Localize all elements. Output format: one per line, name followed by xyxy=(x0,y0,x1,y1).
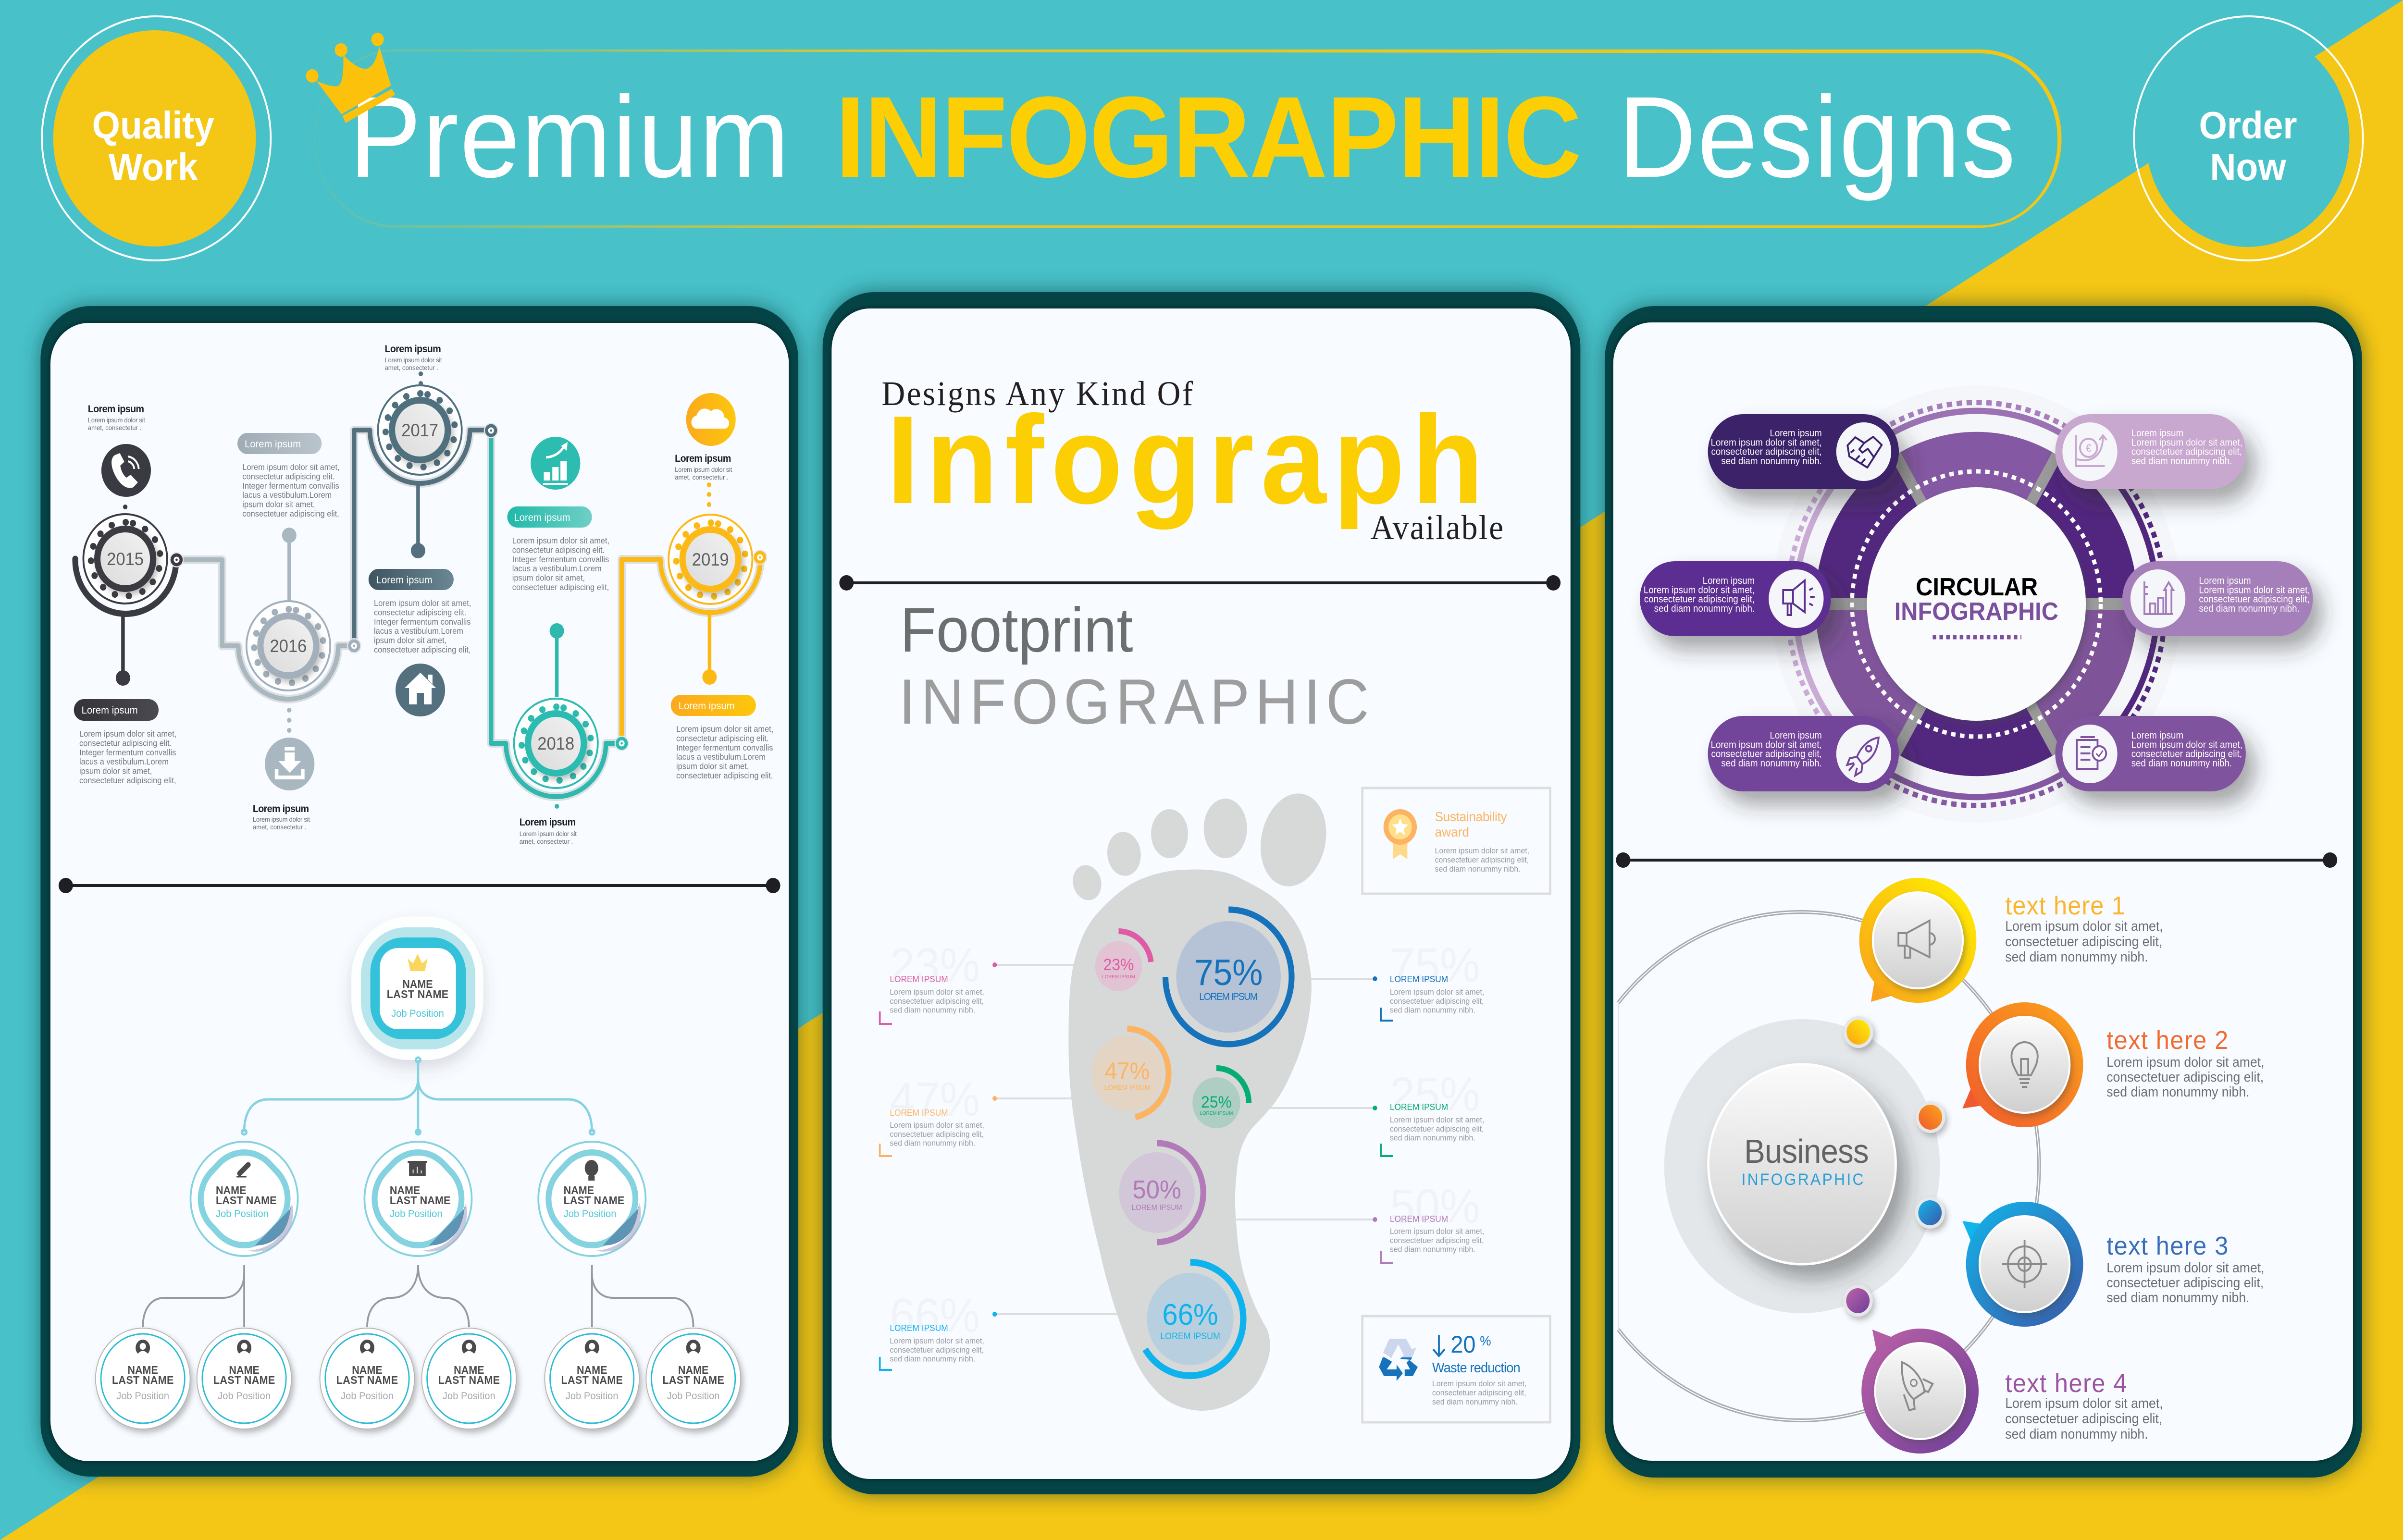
pill: finance growth xyxy=(2055,414,2246,489)
paragraph 2019: Integer fermentum convallis xyxy=(676,743,773,752)
callout 23 percent xyxy=(880,938,997,1024)
pill: megaphone: Lorem ipsum dolor sit amet, xyxy=(1644,585,1755,595)
org chart top node: NAME xyxy=(402,978,433,990)
pill 2019: Lorem ipsum xyxy=(679,700,735,712)
callout 75 percent: sed diam nonummy nibh. xyxy=(1390,1006,1475,1015)
waste reduction box: sed diam nonummy nibh. xyxy=(1432,1398,1518,1406)
icon: growth chart xyxy=(531,437,580,490)
org node left xyxy=(182,1132,307,1266)
pill: rocket: Lorem ipsum xyxy=(1770,730,1822,741)
gauge 50 percent: LOREM IPSUM xyxy=(1132,1204,1182,1212)
lorem 2016 caption: Lorem ipsum dolor sit xyxy=(253,816,310,823)
paragraph 2017: Lorem ipsum dolor sit amet, xyxy=(374,599,471,608)
icon: download xyxy=(265,738,314,790)
paragraph 2015: Lorem ipsum dolor sit amet, xyxy=(79,729,176,739)
org connectors level one xyxy=(242,1058,594,1134)
paragraph 2017: Integer fermentum convallis xyxy=(374,617,471,627)
step 3 text: Lorem ipsum dolor sit amet, xyxy=(2106,1260,2265,1275)
pill: finance growth: sed diam nonummy nibh. xyxy=(2131,456,2232,467)
paragraph 2018: consectetur adipiscing elit. xyxy=(512,545,605,555)
callout 25 percent: consectetuer adipiscing elit, xyxy=(1390,1124,1484,1133)
pill 2019 xyxy=(671,695,756,716)
order now badge: Now xyxy=(2210,146,2286,189)
pill: finance growth: Lorem ipsum dolor sit amet, xyxy=(2131,437,2242,448)
pill: document check: Lorem ipsum xyxy=(2131,730,2183,741)
pill 2017 xyxy=(369,569,454,590)
staff node 1: Job Position xyxy=(116,1390,169,1402)
gauge 50 percent: 50% xyxy=(1133,1176,1181,1204)
staff node 3: Job Position xyxy=(341,1390,394,1402)
paragraph 2017: lacus a vestibulum.Lorem xyxy=(374,627,463,636)
pill 2015 xyxy=(74,699,159,721)
callout 75 percent: Lorem ipsum dolor sit amet, xyxy=(1390,988,1484,997)
callout 25 percent: sed diam nonummy nibh. xyxy=(1390,1133,1475,1143)
staff node 4 xyxy=(421,1328,516,1429)
org chart top node: Job Position xyxy=(391,1008,444,1019)
lorem 2017 top caption: amet, consectetur . xyxy=(385,364,438,371)
gauge 66 percent xyxy=(1145,1262,1243,1376)
staff node 2: LAST NAME xyxy=(213,1374,275,1386)
org connectors level two xyxy=(143,1265,694,1327)
sustainability award box: Sustainability xyxy=(1435,809,1507,824)
step 3 text: sed diam nonummy nibh. xyxy=(2106,1290,2250,1305)
org node right: Job Position xyxy=(564,1208,616,1220)
quality work badge: Quality xyxy=(92,104,214,147)
org chart top node xyxy=(351,917,483,1060)
org node centre: NAME xyxy=(390,1184,420,1196)
org node left: LAST NAME xyxy=(216,1194,277,1207)
step 1 text: Lorem ipsum dolor sit amet, xyxy=(2005,918,2163,934)
waste reduction box: 20 xyxy=(1450,1331,1475,1358)
quality work badge xyxy=(42,16,271,260)
paragraph 2016: consectetur adipiscing elit. xyxy=(242,472,335,481)
pill: partnership xyxy=(1708,414,1899,489)
paragraph 2019: ipsum dolor sit amet, xyxy=(676,762,749,771)
lorem 2017 top caption: Lorem ipsum dolor sit xyxy=(385,357,442,364)
gauge 47 percent xyxy=(1091,1029,1168,1117)
paragraph 2018: ipsum dolor sit amet, xyxy=(512,573,585,583)
business orbit ring xyxy=(1618,912,2039,1420)
pill: megaphone xyxy=(1640,561,1831,636)
paragraph 2016: Lorem ipsum dolor sit amet, xyxy=(242,463,340,472)
year 2015 xyxy=(83,514,184,604)
section divider xyxy=(839,575,1561,591)
lorem 2015 top caption xyxy=(88,404,145,431)
lorem 2018 caption: Lorem ipsum dolor sit xyxy=(520,830,577,838)
year 2018 xyxy=(514,699,629,788)
staff node 5: Job Position xyxy=(566,1390,619,1402)
lorem 2015 top caption: Lorem ipsum xyxy=(88,404,144,415)
org chart top node: LAST NAME xyxy=(387,988,448,1000)
sustainability award box: Lorem ipsum dolor sit amet, xyxy=(1435,847,1529,855)
callout 50 percent xyxy=(1373,1179,1484,1263)
step 4 bubble xyxy=(1861,1329,1979,1454)
gauge 66 percent: LOREM IPSUM xyxy=(1160,1331,1220,1341)
gauge 25 percent xyxy=(1192,1068,1249,1128)
pill: document check: consectetuer adipiscing elit, xyxy=(2131,749,2242,760)
org node left: NAME xyxy=(216,1184,246,1196)
hub dot purple xyxy=(1843,1285,1873,1317)
icon: cloud xyxy=(686,393,736,446)
pill: document check: sed diam nonummy nibh. xyxy=(2131,758,2232,769)
pill: rocket: sed diam nonummy nibh. xyxy=(1721,758,1822,769)
pill: bar growth xyxy=(2122,561,2313,636)
lorem 2018 caption xyxy=(520,817,577,845)
callout 75 percent: 75% xyxy=(1390,938,1480,992)
waste reduction box: consectetuer adipiscing elit, xyxy=(1432,1389,1526,1397)
staff node 3: LAST NAME xyxy=(336,1374,398,1386)
staff node 5: LAST NAME xyxy=(561,1374,623,1386)
staff node 6: Job Position xyxy=(667,1390,720,1402)
gauge 23 percent xyxy=(1095,931,1151,991)
heading: designs any kind of: Designs Any Kind Of xyxy=(881,375,1193,413)
timeline connectors xyxy=(75,430,760,797)
pill: document check xyxy=(2055,716,2246,791)
callout 25 percent: Lorem ipsum dolor sit amet, xyxy=(1390,1116,1484,1124)
pill 2018 xyxy=(507,506,592,528)
panel: circular and business infographics xyxy=(1605,306,2362,1478)
staff node 2: NAME xyxy=(229,1364,260,1376)
year 2019 xyxy=(669,515,767,604)
order now badge xyxy=(2134,16,2363,260)
callout 50 percent: consectetuer adipiscing elit, xyxy=(1390,1236,1484,1245)
staff node 6: LAST NAME xyxy=(662,1374,724,1386)
callout 50 percent: Lorem ipsum dolor sit amet, xyxy=(1390,1227,1484,1236)
pill 2018: Lorem ipsum xyxy=(514,512,570,523)
circular centre disc: CIRCULAR xyxy=(1916,573,2038,601)
section divider xyxy=(1616,852,2337,868)
lorem 2015 top caption: Lorem ipsum dolor sit xyxy=(88,417,145,424)
org node right xyxy=(530,1132,655,1266)
step 3 text xyxy=(2106,1232,2265,1305)
gauge 25 percent: LOREM IPSUM xyxy=(1200,1111,1233,1116)
pill: document check: Lorem ipsum dolor sit amet, xyxy=(2131,739,2242,750)
waste reduction box: % xyxy=(1480,1333,1491,1348)
pill: bar growth: consectetuer adipiscing elit, xyxy=(2199,594,2310,605)
paragraph 2017: consectetuer adipiscing elit, xyxy=(374,645,471,654)
main title highlight: INFOGRAPHIC xyxy=(835,73,1582,202)
staff node 2: Job Position xyxy=(218,1390,271,1402)
year 2019: 2019 xyxy=(692,550,729,569)
paragraph 2015: lacus a vestibulum.Lorem xyxy=(79,757,169,766)
gauge 66 percent: 66% xyxy=(1162,1298,1218,1331)
staff node 4: NAME xyxy=(454,1364,484,1376)
step 2 text: sed diam nonummy nibh. xyxy=(2106,1084,2250,1099)
step 1 text: consectetuer adipiscing elit, xyxy=(2005,934,2162,949)
staff node 4: LAST NAME xyxy=(438,1374,500,1386)
callout 50 percent: LOREM IPSUM xyxy=(1390,1214,1448,1224)
paragraph 2019: consectetuer adipiscing elit, xyxy=(676,771,773,780)
pill: rocket xyxy=(1708,716,1899,791)
org node centre: LAST NAME xyxy=(390,1194,450,1207)
callout 75 percent: consectetuer adipiscing elit, xyxy=(1390,997,1484,1006)
business hub: INFOGRAPHIC xyxy=(1741,1170,1863,1188)
paragraph 2016: Integer fermentum convallis xyxy=(242,481,339,491)
callout 75 percent xyxy=(1373,938,1484,1021)
lorem 2019 caption xyxy=(675,453,732,481)
leader lines xyxy=(995,965,1375,1314)
panel: timeline and org chart xyxy=(40,306,798,1477)
step 4 text: Lorem ipsum dolor sit amet, xyxy=(2005,1395,2163,1411)
waste reduction box: Waste reduction xyxy=(1432,1360,1521,1375)
gauge 50 percent xyxy=(1119,1143,1203,1242)
gauge 75 percent xyxy=(1165,910,1291,1044)
lorem 2015 top caption: amet, consectetur . xyxy=(88,424,141,431)
callout 50 percent: sed diam nonummy nibh. xyxy=(1390,1245,1475,1254)
step 3 text: text here 3 xyxy=(2106,1232,2228,1260)
staff node 2 xyxy=(197,1328,291,1429)
sustainability award box xyxy=(1363,788,1550,894)
pill: partnership: Lorem ipsum dolor sit amet, xyxy=(1711,437,1822,448)
step 1 bubble xyxy=(1859,878,1976,1003)
main title: Premium xyxy=(349,73,789,202)
callout 66 percent xyxy=(880,1288,997,1370)
hub dot orange xyxy=(1916,1101,1945,1133)
circular centre disc xyxy=(1867,487,2086,721)
heading: infographic: INFOGRAPHIC xyxy=(899,666,1369,738)
paragraph 2016: consectetuer adipiscing elit, xyxy=(242,509,339,518)
staff node 6: NAME xyxy=(678,1364,708,1376)
step 4 text: sed diam nonummy nibh. xyxy=(2005,1426,2148,1441)
gauge 25 percent: 25% xyxy=(1201,1093,1232,1111)
paragraph 2018: Integer fermentum convallis xyxy=(512,554,609,564)
lorem 2019 caption: Lorem ipsum dolor sit xyxy=(675,466,732,473)
lorem 2017 top caption xyxy=(385,344,442,371)
staff node 1 xyxy=(96,1328,190,1429)
staff node 3: NAME xyxy=(352,1364,383,1376)
sustainability award box: award xyxy=(1435,824,1469,839)
pill: rocket: consectetuer adipiscing elit, xyxy=(1711,749,1822,760)
order now badge: Order xyxy=(2199,104,2297,147)
gauge 47 percent: LOREM IPSUM xyxy=(1104,1084,1150,1091)
callout 47 percent: Lorem ipsum dolor sit amet, xyxy=(890,1121,984,1130)
lorem 2016 caption: Lorem ipsum xyxy=(253,803,309,814)
heading: infograph: Infograph xyxy=(887,390,1484,530)
callout 66 percent: Lorem ipsum dolor sit amet, xyxy=(890,1337,984,1345)
paragraph 2016: lacus a vestibulum.Lorem xyxy=(242,491,332,500)
lorem 2018 caption: amet, consectetur . xyxy=(520,838,573,845)
callout 66 percent: LOREM IPSUM xyxy=(890,1323,948,1333)
callout 23 percent: Lorem ipsum dolor sit amet, xyxy=(890,988,984,997)
callout 75 percent: LOREM IPSUM xyxy=(1390,974,1448,984)
step 1 text: text here 1 xyxy=(2005,892,2125,920)
callout 47 percent: 47% xyxy=(890,1072,980,1126)
heading: footprint: Footprint xyxy=(900,594,1133,665)
staff node 5: NAME xyxy=(577,1364,607,1376)
year 2015: 2015 xyxy=(107,549,144,569)
hub dot blue xyxy=(1915,1197,1945,1229)
staff node 1: NAME xyxy=(127,1364,158,1376)
pill 2015: Lorem ipsum xyxy=(82,704,138,716)
paragraph 2016: ipsum dolor sit amet, xyxy=(242,500,315,509)
pill 2016: Lorem ipsum xyxy=(245,438,301,450)
pill 2017: Lorem ipsum xyxy=(376,574,433,586)
callout 50 percent: 50% xyxy=(1390,1179,1480,1233)
hub dot yellow xyxy=(1844,1016,1873,1048)
paragraph 2018: Lorem ipsum dolor sit amet, xyxy=(512,536,609,545)
paragraph 2018: lacus a vestibulum.Lorem xyxy=(512,564,602,573)
step 4 text: consectetuer adipiscing elit, xyxy=(2005,1411,2162,1426)
pill: finance growth: Lorem ipsum xyxy=(2131,428,2183,439)
paragraph 2019: Lorem ipsum dolor sit amet, xyxy=(676,725,773,734)
pill: rocket: Lorem ipsum dolor sit amet, xyxy=(1711,739,1822,750)
callout 23 percent: LOREM IPSUM xyxy=(890,974,948,984)
step 3 text: consectetuer adipiscing elit, xyxy=(2106,1275,2264,1290)
staff node 6 xyxy=(646,1328,741,1429)
paragraph 2015: Integer fermentum convallis xyxy=(79,748,176,757)
gauge 23 percent: LOREM IPSUM xyxy=(1102,974,1135,980)
main title end: Designs xyxy=(1618,73,2016,202)
circular chart rings xyxy=(1771,385,2181,823)
business hub xyxy=(1664,1019,1940,1313)
pill: megaphone: consectetuer adipiscing elit, xyxy=(1644,594,1755,605)
callout 25 percent: 25% xyxy=(1390,1067,1480,1121)
circular centre disc: INFOGRAPHIC xyxy=(1895,597,2058,625)
gauge 75 percent: 75% xyxy=(1194,952,1263,993)
step 4 text: text here 4 xyxy=(2005,1369,2127,1398)
icon: house xyxy=(396,664,445,716)
year 2018: 2018 xyxy=(537,734,574,753)
callout 66 percent: 66% xyxy=(890,1288,980,1343)
gauge 23 percent: 23% xyxy=(1103,955,1134,973)
callout 23 percent: sed diam nonummy nibh. xyxy=(890,1006,975,1015)
year 2016 xyxy=(247,601,361,690)
lorem 2019 caption: Lorem ipsum xyxy=(675,453,731,464)
waste reduction box xyxy=(1363,1316,1550,1422)
step 3 bubble xyxy=(1962,1202,2083,1327)
callout 23 percent: consectetuer adipiscing elit, xyxy=(890,997,984,1006)
lorem 2018 caption: Lorem ipsum xyxy=(520,817,576,828)
paragraph 2018: consectetuer adipiscing elit, xyxy=(512,583,609,592)
gauge 75 percent: LOREM IPSUM xyxy=(1199,991,1258,1002)
callout 47 percent: LOREM IPSUM xyxy=(890,1108,948,1118)
pill: partnership: sed diam nonummy nibh. xyxy=(1721,456,1822,467)
staff node 3 xyxy=(320,1328,414,1429)
pill: megaphone: Lorem ipsum xyxy=(1703,575,1755,586)
pill: bar growth: Lorem ipsum dolor sit amet, xyxy=(2199,585,2310,595)
year 2016: 2016 xyxy=(270,636,307,656)
panel: footprint infographic xyxy=(823,292,1580,1494)
org node left: Job Position xyxy=(216,1208,269,1220)
gauge 47 percent: 47% xyxy=(1104,1058,1150,1084)
callout 47 percent xyxy=(880,1072,997,1156)
section divider xyxy=(59,878,780,893)
org node right: NAME xyxy=(564,1184,594,1196)
callout 25 percent xyxy=(1373,1067,1484,1156)
callout 23 percent: 23% xyxy=(890,938,980,992)
org node centre xyxy=(356,1132,481,1266)
pill: finance growth: consectetuer adipiscing elit, xyxy=(2131,446,2242,457)
paragraph 2019: lacus a vestibulum.Lorem xyxy=(676,752,766,762)
quality work badge: Work xyxy=(109,146,198,189)
lorem 2016 caption: amet, consectetur . xyxy=(253,824,306,831)
paragraph 2015: consectetur adipiscing elit. xyxy=(79,739,172,748)
org node centre: Job Position xyxy=(390,1208,443,1220)
footprint shape xyxy=(1068,786,1335,1411)
staff node 1: LAST NAME xyxy=(112,1374,173,1386)
lorem 2017 top caption: Lorem ipsum xyxy=(385,344,441,355)
pill: bar growth: sed diam nonummy nibh. xyxy=(2199,603,2300,614)
staff node 5 xyxy=(545,1328,639,1429)
business hub: Business xyxy=(1744,1133,1869,1170)
paragraph 2017: ipsum dolor sit amet, xyxy=(374,636,446,645)
icon: phone xyxy=(101,444,151,497)
paragraph 2015: ipsum dolor sit amet, xyxy=(79,766,152,776)
lorem 2019 caption: amet, consectetur . xyxy=(675,474,729,481)
staff node 4: Job Position xyxy=(443,1390,495,1402)
paragraph 2019: consectetur adipiscing elit. xyxy=(676,734,768,743)
org node right: LAST NAME xyxy=(564,1194,624,1207)
paragraph 2017: consectetur adipiscing elit. xyxy=(374,608,466,617)
step 4 text xyxy=(2005,1369,2163,1441)
year 2017: 2017 xyxy=(401,420,438,440)
pill: finance growth: € xyxy=(2086,442,2092,454)
callout 47 percent: consectetuer adipiscing elit, xyxy=(890,1130,984,1139)
sustainability award box: sed diam nonummy nibh. xyxy=(1435,865,1521,874)
step 1 text: sed diam nonummy nibh. xyxy=(2005,949,2148,964)
heading: available: Available xyxy=(1371,509,1503,547)
step 2 bubble xyxy=(1962,1002,2083,1127)
callout 47 percent: sed diam nonummy nibh. xyxy=(890,1139,975,1148)
waste reduction box: Lorem ipsum dolor sit amet, xyxy=(1432,1380,1526,1388)
callout 66 percent: sed diam nonummy nibh. xyxy=(890,1355,975,1364)
step 2 text: consectetuer adipiscing elit, xyxy=(2106,1069,2264,1084)
pill: partnership: Lorem ipsum xyxy=(1770,428,1822,439)
step 2 text: text here 2 xyxy=(2106,1026,2228,1055)
step 2 text: Lorem ipsum dolor sit amet, xyxy=(2106,1054,2265,1070)
small connector dots xyxy=(123,371,711,809)
lorem 2016 caption xyxy=(253,803,310,831)
pill: partnership: consectetuer adipiscing elit, xyxy=(1711,446,1822,457)
year 2017 xyxy=(378,385,498,475)
pill: bar growth: Lorem ipsum xyxy=(2199,575,2251,586)
pill 2016 xyxy=(237,433,322,454)
callout 25 percent: LOREM IPSUM xyxy=(1390,1102,1448,1112)
crown icon xyxy=(306,33,395,123)
step 2 text xyxy=(2106,1026,2265,1099)
sustainability award box: consectetuer adipiscing elit, xyxy=(1435,856,1529,864)
callout 66 percent: consectetuer adipiscing elit, xyxy=(890,1345,984,1355)
paragraph 2015: consectetuer adipiscing elit, xyxy=(79,776,176,785)
step 1 text xyxy=(2005,892,2163,964)
pill: megaphone: sed diam nonummy nibh. xyxy=(1654,603,1755,614)
title frame xyxy=(314,49,2061,228)
stems with end dots xyxy=(116,484,717,697)
